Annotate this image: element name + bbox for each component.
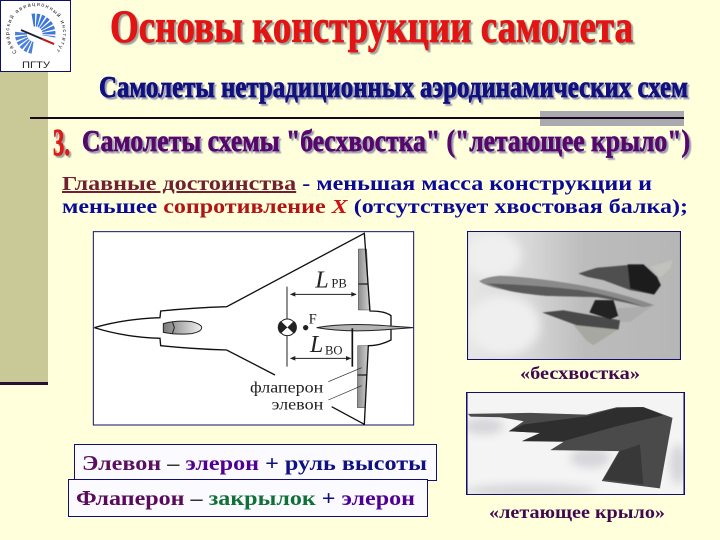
L BO arrow: L (309, 332, 323, 358)
main advantages text: Главные достоинства - меньшая масса конструкции и (62, 173, 652, 195)
flying wing aircraft (468, 407, 673, 488)
L PB arrow (290, 267, 357, 297)
divider with grey accent (30, 111, 684, 126)
main advantages text: меньшее сопротивление X (отсутствует хвостовая балка); (62, 196, 688, 218)
cockpit (163, 321, 202, 334)
elevon label: элевон (272, 396, 324, 413)
panel: aircraft planform diagram (93, 232, 414, 425)
strut (589, 300, 618, 319)
main advantages text (62, 173, 688, 218)
upper engine (578, 265, 660, 294)
caption: flying wing: «летающее крыло» (489, 502, 665, 522)
fuselage (479, 276, 654, 307)
L BO arrow: ВО (325, 343, 343, 357)
airframe outline (94, 233, 391, 424)
logo: PGTU emblem: Самарский авиационный институт (6, 2, 66, 54)
L PB arrow: РВ (331, 276, 347, 290)
callout: flaperon definition (68, 480, 428, 516)
elevon label (272, 386, 362, 413)
logo: PGTU emblem (0, 0, 71, 72)
photo: flying wing (466, 392, 685, 495)
L BO arrow (290, 328, 352, 367)
elevon surfaces (357, 249, 369, 408)
lower engine (542, 310, 620, 330)
left sidebar band (0, 72, 48, 385)
callout: elevon definition: Элевон – элерон + руль высоты (82, 451, 427, 475)
photo: tailless aircraft (467, 231, 681, 360)
flaperon label (250, 368, 362, 396)
centre of mass and focus (278, 287, 317, 367)
callout: flaperon definition: Флаперон – закрылок + элерон (76, 486, 415, 510)
lower wing (573, 325, 618, 345)
L PB arrow: L (314, 267, 329, 293)
fin (317, 325, 413, 331)
flaperon label: флаперон (250, 379, 324, 396)
caption: tailless: «бесхвостка» (520, 363, 640, 383)
callout: elevon definition (74, 444, 436, 480)
centre of mass and focus: F (309, 312, 317, 328)
section number: 3. (53, 122, 70, 164)
logo: PGTU emblem: ПГТУ (22, 60, 50, 70)
upper wing tip (650, 260, 673, 277)
